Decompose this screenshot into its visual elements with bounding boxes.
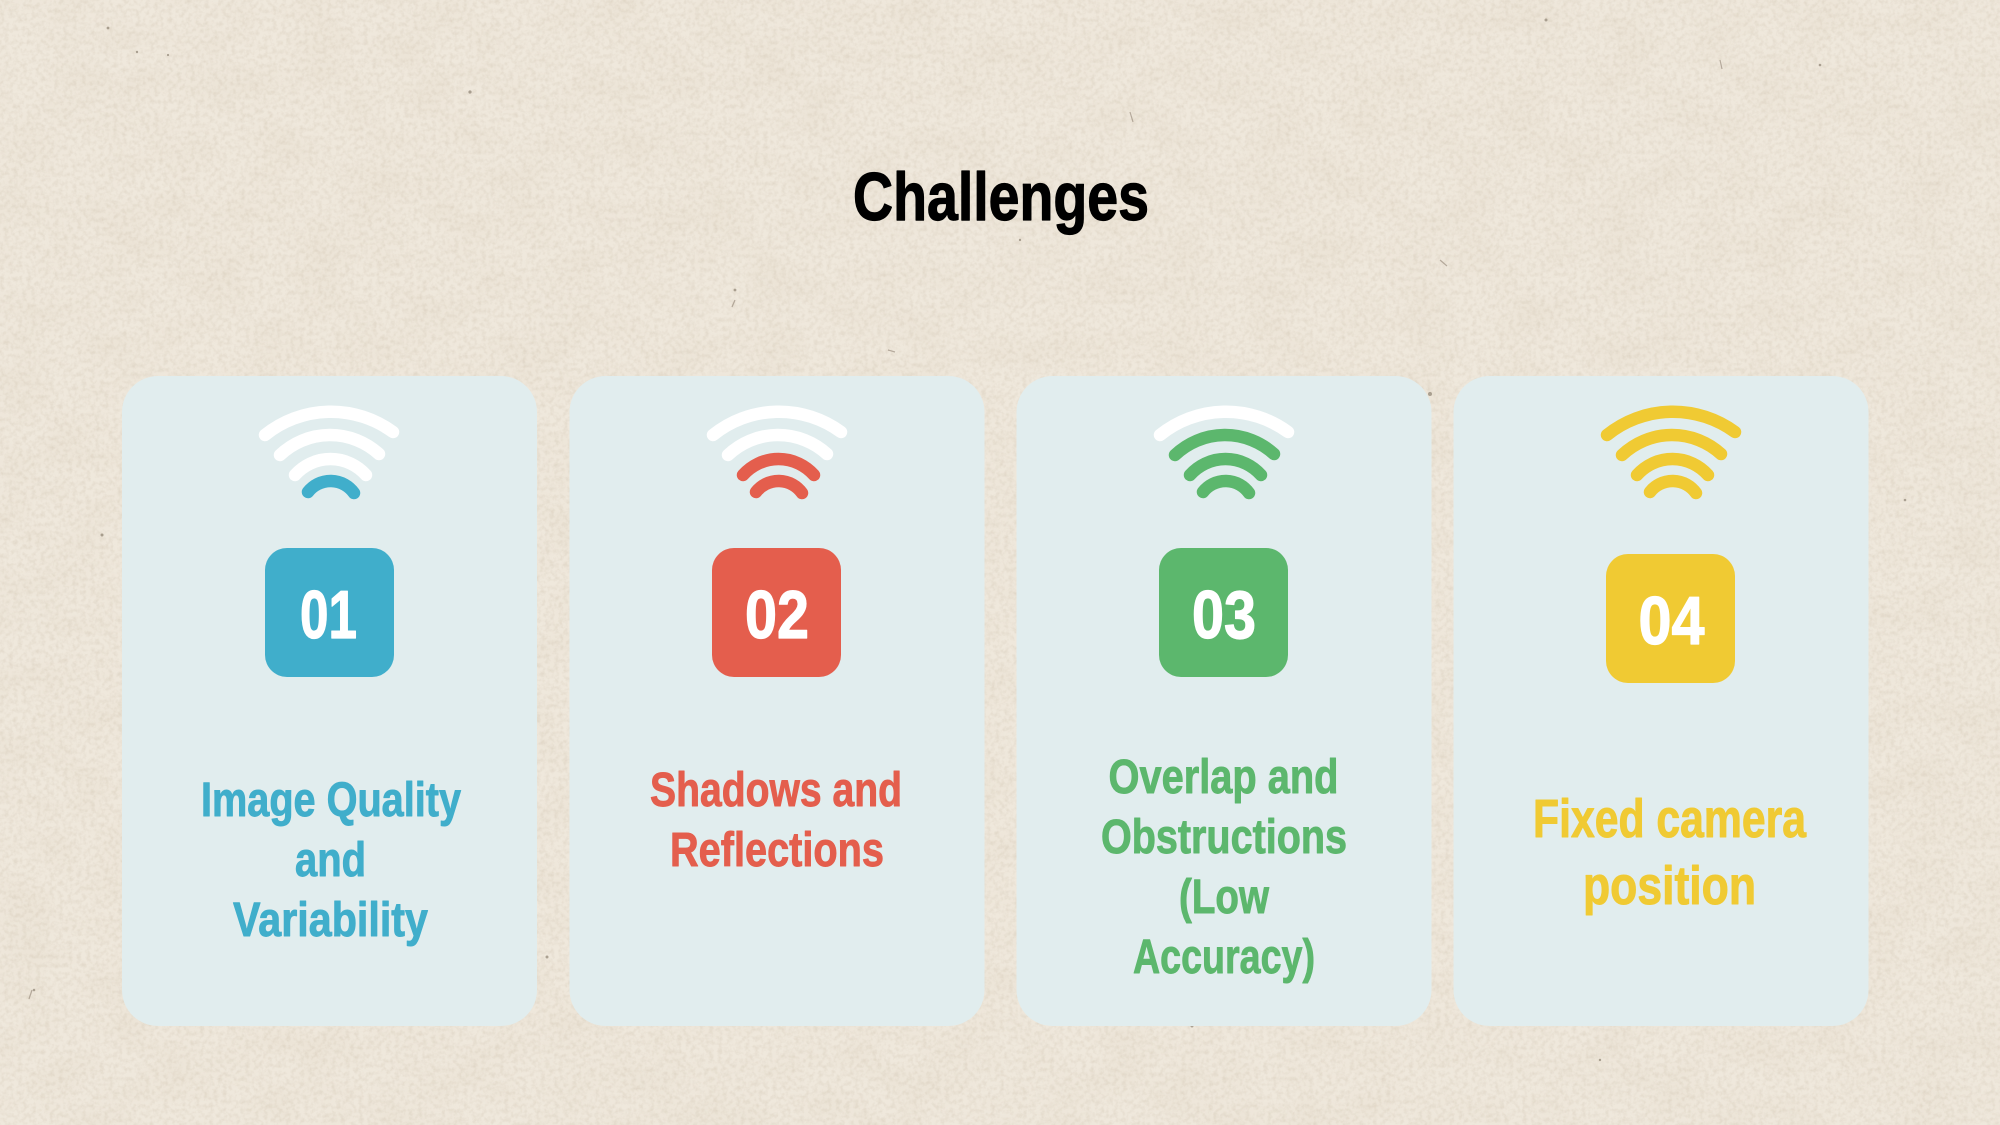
label: overlap and obstructions (low accuracy): Obstructions — [1101, 811, 1347, 864]
label: fixed camera position: position — [1583, 856, 1756, 916]
icon: signal arcs, one level active — [265, 412, 393, 493]
icon: signal arcs, three levels active — [1160, 412, 1288, 493]
label: image quality and variability: Variability — [233, 894, 428, 947]
label: overlap and obstructions (low accuracy): Accuracy) — [1133, 931, 1315, 984]
number badge 02 — [712, 548, 841, 677]
label: image quality and variability — [201, 774, 461, 947]
title: Challenges — [853, 159, 1149, 235]
panel: card 03 overlap and obstructions — [1016, 376, 1432, 1026]
icon: signal arcs, all levels active — [1607, 412, 1735, 493]
label: shadows and reflections: Shadows and — [650, 764, 902, 817]
label: overlap and obstructions (low accuracy) — [1101, 751, 1347, 984]
number badge 02: 02 — [745, 577, 809, 653]
label: shadows and reflections — [650, 764, 902, 877]
label: image quality and variability: Image Quality — [201, 774, 461, 827]
label: overlap and obstructions (low accuracy): Overlap and — [1108, 751, 1338, 804]
label: overlap and obstructions (low accuracy): (Low — [1179, 871, 1270, 924]
label: fixed camera position — [1533, 789, 1807, 916]
number badge 03: 03 — [1192, 577, 1256, 653]
number badge 01 — [265, 548, 394, 677]
label: fixed camera position: Fixed camera — [1533, 789, 1807, 849]
label: image quality and variability: and — [295, 834, 366, 887]
number badge 03 — [1159, 548, 1288, 677]
panel: card 01 image quality — [122, 376, 537, 1026]
number badge 01: 01 — [300, 577, 357, 653]
panel: card 04 fixed camera position — [1454, 376, 1868, 1026]
panel: card 02 shadows and reflections — [570, 376, 984, 1026]
number badge 04: 04 — [1638, 583, 1705, 659]
number badge 04 — [1606, 554, 1735, 683]
label: shadows and reflections: Reflections — [670, 824, 884, 877]
icon: signal arcs, two levels active — [713, 412, 841, 493]
